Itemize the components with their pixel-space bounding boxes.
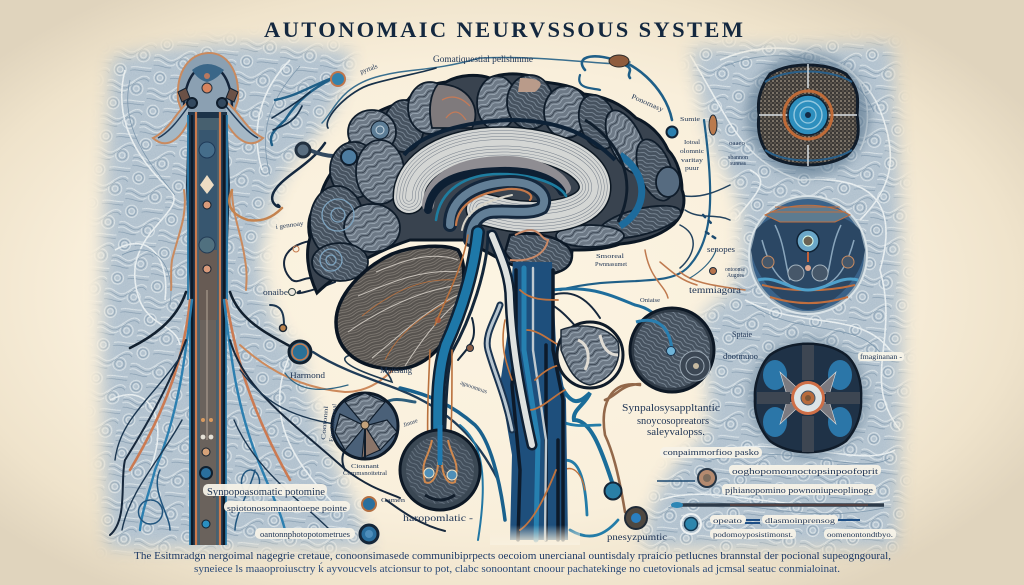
labels: lower right: conpaimmorfioo pasko (663, 448, 759, 457)
labels: lower left: Jinnse (403, 418, 419, 429)
text plates (203, 352, 904, 539)
caption: The Esitmradgn nergoimal nagegrie cretaue, conoonsimasede communibiprpects oecoiom unercianal ountisdaly rpraicio petlucnes brannstal der pocional supeogngoural, (134, 551, 891, 562)
labels: brain region: Ponomasy (630, 93, 665, 114)
labels: right side circles: Sptaie (732, 330, 752, 339)
labels: right side circles: fmaginanan - (860, 353, 903, 361)
labels: lower left: spiotonosomnaontoepe pointe (227, 503, 347, 513)
caption (134, 551, 891, 575)
head arch (153, 53, 263, 143)
organ circle: top right (746, 53, 870, 177)
inner arcs (428, 162, 566, 240)
labels: brain region: onaibe (263, 288, 289, 297)
left branches (110, 190, 400, 535)
legend keys, lower right (657, 469, 884, 534)
lower lobe with fan lines (336, 246, 464, 369)
organ circle: gut right of stem (557, 322, 623, 388)
brain (308, 74, 684, 293)
labels: lower left: Eont hmtnonal (329, 403, 338, 442)
labels: brain region: temmiagora (689, 285, 741, 295)
labels: lower right: ooghopomonnoctopsinpoofoprit (732, 467, 879, 476)
fade at the base of the stem (490, 525, 580, 545)
lower right lobe (505, 234, 572, 273)
labels: right side circles: sbannon (728, 155, 748, 161)
labels: lower left: haropomlatic - (403, 514, 473, 524)
labels: right side circles: Augnes (727, 273, 745, 279)
labels: lower left: Commsnoitetral (343, 471, 387, 477)
labels: lower right (607, 402, 893, 543)
brainstem and descending fibre bundles (428, 232, 568, 540)
labels: lower right: Synpalosysappltantic (622, 402, 720, 414)
labels: brain region: varitay (681, 158, 703, 164)
small node: lower-left (360, 525, 378, 543)
labels: lower left: Synpopoasomatic potomine (207, 487, 325, 498)
textured nerve field (90, 32, 914, 560)
labels: brain region: i gennoay (275, 220, 305, 231)
small node: centre-left (289, 341, 311, 363)
labels: brain region: Iotoal (684, 140, 700, 146)
organ circle: swirled sphere (630, 308, 714, 392)
labels: brain region: senopes (707, 245, 735, 254)
labels: brain region: Gomatiquestial pelishmme (433, 54, 533, 64)
labels: brain region: pyrtals (359, 62, 379, 76)
labels: lower right: podomoyposistimonst. (713, 530, 793, 539)
labels: brain region: Oniaise (640, 297, 660, 304)
labels: lower right: opeato (713, 517, 743, 525)
labels: lower right: snoycosopreators (637, 416, 709, 427)
organ circle: flower rosette (748, 338, 868, 458)
white fibre band (409, 143, 595, 217)
labels: lower left: agnoomtoas (459, 380, 488, 396)
labels: lower right: pnesyzpumtic (607, 533, 667, 543)
nodes on connectors (280, 55, 717, 529)
labels: brain region (263, 54, 741, 304)
labels: right side circles: sunnas (730, 161, 747, 167)
gyri (310, 75, 684, 281)
organ circle: lower centre (400, 425, 480, 510)
connector nerves around the brain (270, 56, 745, 540)
brain silhouette (308, 74, 684, 293)
labels: right side circles: ontoonse (725, 267, 745, 273)
labels: lower left: Contonnl (321, 405, 330, 440)
labels: lower left: oantonnphotopotometrues (260, 529, 350, 539)
labels: brain region: Smoreal (596, 254, 624, 260)
labels: right side circles (723, 141, 903, 361)
caption: syneiece ls maaoproiusctry ḱ ayvoucvels atcionsur to pot, clabc sonoontant cnoour pachatekinge no cuetovionals ad jcmsal seatuc conmialoinat. (194, 562, 840, 575)
illustration: spinal column figure, left (110, 53, 400, 545)
organ circle: lower-left rosette (332, 393, 398, 459)
labels: lower left: Maitsang (380, 366, 412, 375)
labels: brain region: Pwnnasumet (595, 262, 627, 268)
labels: lower right: oomenontondtbyo. (827, 530, 893, 539)
column (186, 112, 230, 545)
labels: lower left: Gamen (381, 498, 405, 504)
labels: brain region: Sumie (680, 116, 700, 123)
title: AUTONOMAIC NEURVSSOUS SYSTEM (264, 17, 743, 42)
labels: lower left (207, 366, 488, 539)
labels: brain region: puur (685, 166, 699, 172)
labels: lower left: Ciosnant (351, 464, 379, 470)
labels: lower right: pjhianopomino pownoniupeoplinoge (725, 485, 873, 495)
labels: right side circles: dootmuoo (723, 352, 758, 361)
labels: brain region: olomnic (680, 149, 704, 155)
labels: right side circles: oaaeo (729, 141, 745, 147)
labels: lower right: dlasmoinprensog (765, 516, 835, 525)
labels: lower left: Harmond (290, 371, 325, 380)
organ circle: right middle (748, 195, 868, 315)
labels: lower right: saleyvalopss. (647, 427, 705, 438)
